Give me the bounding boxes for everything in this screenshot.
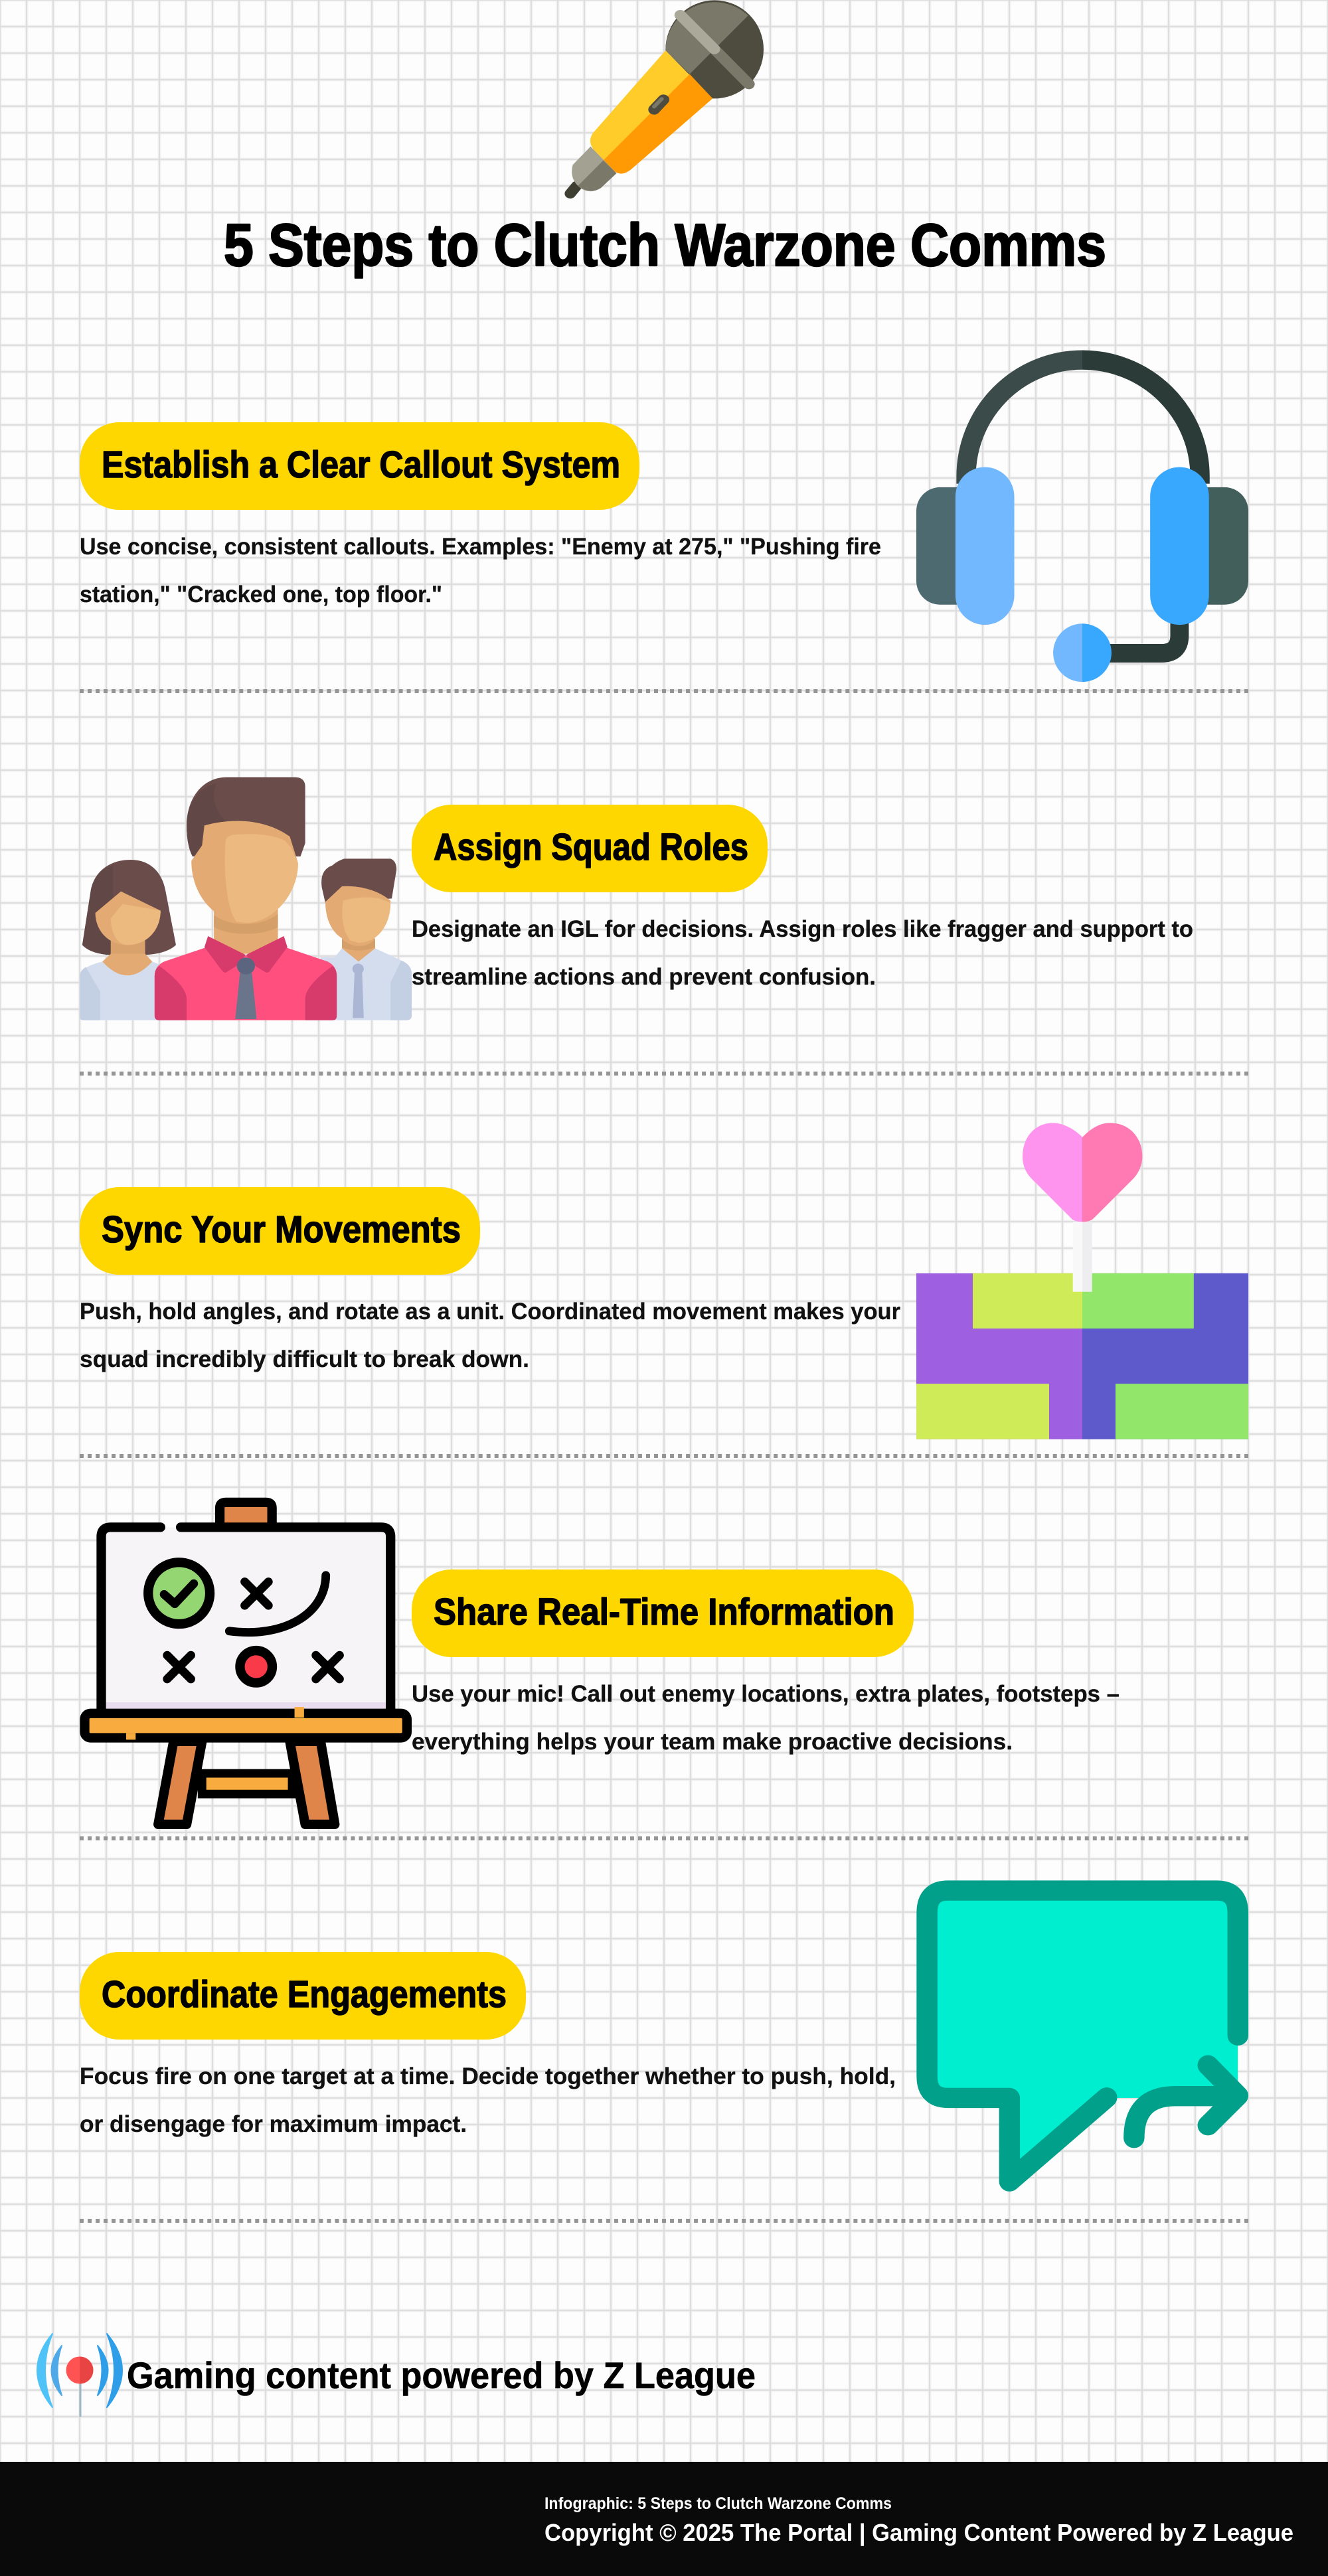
body text: station," "Cracked one, top floor." (80, 582, 442, 607)
body text: Use your mic! Call out enemy locations, extra plates, footsteps – (412, 1681, 1120, 1707)
body text: or disengage for maximum impact. (80, 2111, 467, 2137)
body text (80, 1299, 900, 1372)
icon: headset (916, 360, 1248, 682)
heading pill (80, 1952, 526, 2040)
body text: Use concise, consistent callouts. Examples: "Enemy at 275," "Pushing fire (80, 534, 881, 560)
panel: step 2 squad roles (80, 777, 1193, 1020)
heading pill (80, 1187, 480, 1275)
icon: microphone (570, 0, 764, 194)
body text (80, 2063, 896, 2137)
heading pill: Assign Squad Roles (434, 826, 748, 868)
icon: broadcast signal pin (37, 2334, 122, 2417)
heading pill: Sync Your Movements (102, 1208, 461, 1251)
body text (412, 916, 1193, 990)
heading pill: Share Real-Time Information (434, 1591, 894, 1633)
copyright: Copyright © 2025 The Portal | Gaming Content Powered by Z League (544, 2519, 1293, 2547)
body text (80, 534, 881, 607)
panel: step 4 real-time information (84, 1502, 1120, 1824)
body text: streamline actions and prevent confusion. (412, 964, 876, 990)
body text: squad incredibly difficult to break down. (80, 1346, 529, 1372)
body text (412, 1681, 1120, 1755)
panel: step 5 coordinate engagements (80, 1891, 1238, 2182)
footer bar (0, 2462, 1328, 2576)
heading pill (80, 422, 639, 510)
heading pill (412, 805, 768, 892)
icon: speech bubble with arrow (927, 1891, 1238, 2182)
icon: interlocking blocks and heart (916, 1123, 1248, 1439)
body text: Push, hold angles, and rotate as a unit. Coordinated movement makes your (80, 1299, 900, 1325)
panel: step 3 sync movements (80, 1123, 1248, 1439)
body text: everything helps your team make proactive decisions. (412, 1729, 1013, 1755)
dividers (80, 691, 1248, 2221)
footer caption: Infographic: 5 Steps to Clutch Warzone Comms (544, 2494, 892, 2513)
body text: Designate an IGL for decisions. Assign roles like fragger and support to (412, 916, 1193, 942)
heading pill (412, 1570, 914, 1657)
heading pill: Establish a Clear Callout System (102, 443, 620, 486)
icon: three people (80, 777, 412, 1020)
body text: Focus fire on one target at a time. Decide together whether to push, hold, (80, 2063, 896, 2089)
title: 5 Steps to Clutch Warzone Comms (224, 212, 1106, 279)
heading pill: Coordinate Engagements (102, 1973, 507, 2016)
panel: step 1 establish callouts (80, 360, 1248, 682)
sponsor line: Gaming content powered by Z League (127, 2354, 756, 2396)
icon: tactics easel (84, 1502, 407, 1824)
